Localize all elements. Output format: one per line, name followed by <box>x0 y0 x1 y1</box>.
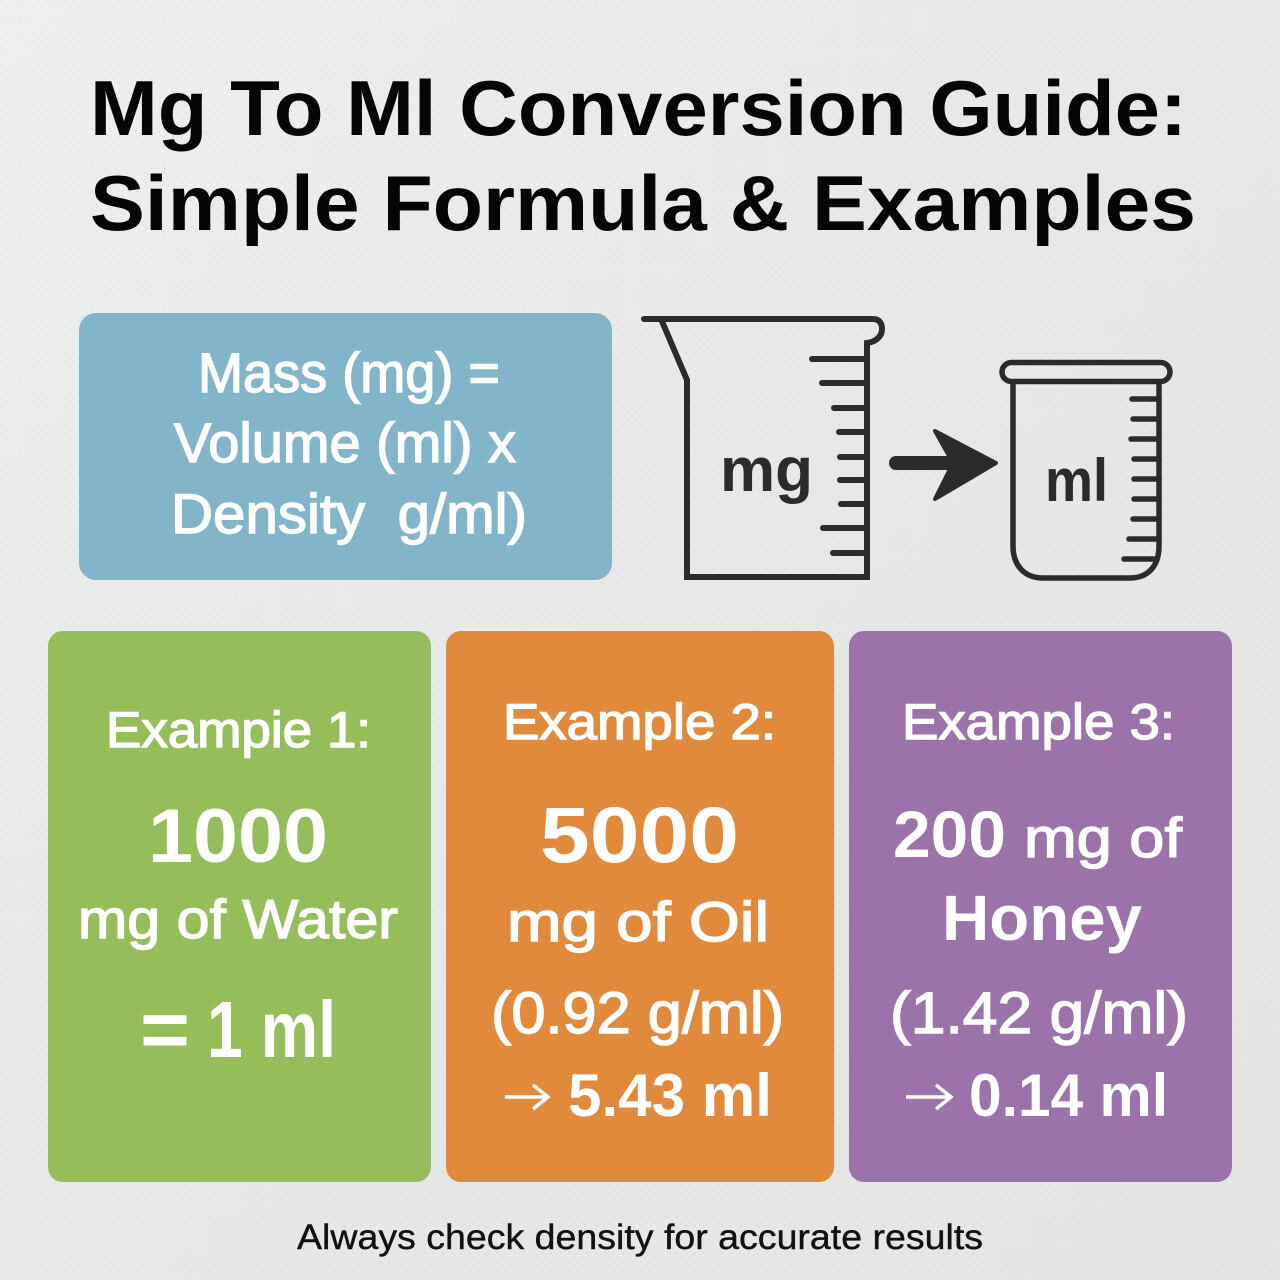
example 3 substance: Honey <box>942 882 1142 954</box>
example 3 amount <box>893 797 1182 871</box>
example 2 substance: mg of Oil <box>507 890 769 953</box>
example 3 amount: 200 <box>893 797 1006 871</box>
title: Mg To Ml Conversion Guide: <box>90 64 1187 152</box>
example 3 result: 0.14 ml <box>969 1062 1168 1129</box>
example 3 amount: mg of <box>1024 806 1182 869</box>
example 3 heading: Example 3: <box>902 694 1175 750</box>
example 1 result <box>140 985 336 1074</box>
example 2 amount: 5000 <box>540 790 739 879</box>
arrow <box>889 431 996 499</box>
example 1 substance: mg of Water <box>78 888 398 950</box>
panel: formula <box>79 313 612 580</box>
example 1 amount: 1000 <box>148 794 328 879</box>
formula text: Mass (mg) = <box>198 341 500 404</box>
icon: mg beaker <box>644 319 882 577</box>
icon: ml beaker <box>1002 362 1170 578</box>
formula text: Density g/ml) <box>171 482 527 545</box>
beaker label: mg: mg <box>720 436 813 505</box>
title: Simple Formula & Examples <box>90 159 1196 247</box>
panel: example 3 <box>849 631 1232 1182</box>
example 2 result: 5.43 ml <box>568 1062 772 1129</box>
panel: example 2 <box>446 631 834 1182</box>
example 1 result: 1 ml <box>207 985 336 1074</box>
example 2 density: (0.92 g/ml) <box>491 981 784 1046</box>
example 1 heading: Exampie 1: <box>106 702 371 758</box>
title <box>90 64 1196 247</box>
formula text: Volume (ml) x <box>174 411 516 474</box>
footer note: Always check density for accurate results <box>297 1218 983 1257</box>
example 3 density: (1.42 g/ml) <box>890 981 1188 1046</box>
example 2 heading: Example 2: <box>503 694 776 750</box>
formula text <box>171 341 527 545</box>
beaker label: ml: ml <box>1045 447 1108 514</box>
panel: example 1 <box>48 631 431 1182</box>
example 1 result: = <box>140 985 190 1074</box>
